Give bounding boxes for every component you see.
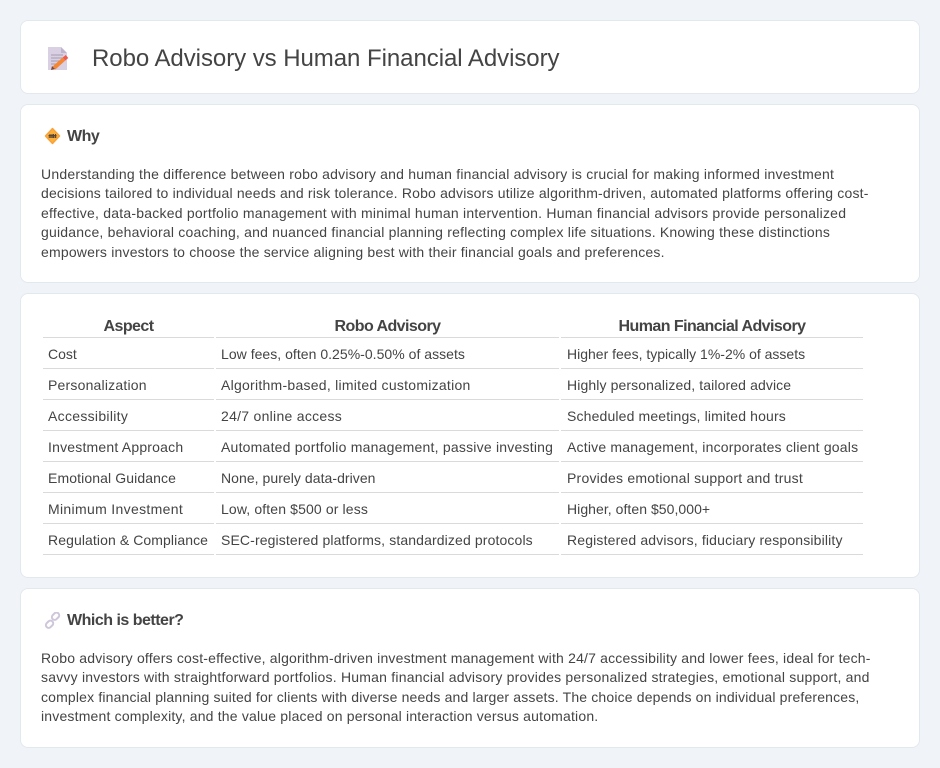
- panel: title header: [20, 20, 920, 94]
- text block: verdict: [41, 650, 871, 724]
- row: regulation and compliance: Regulation & Compliance: [48, 532, 208, 548]
- text block: why explanation: decisions tailored to individual needs and risk tolerance. Robo advisors utilize algorithm-driven, automated platforms offering cost-: [41, 185, 869, 201]
- text block: verdict: Robo advisory offers cost-effective, algorithm-driven investment management with 24/7 accessibility and lower fees, ideal for tech-: [41, 650, 871, 666]
- row: investment approach: Automated portfolio management, passive investing: [221, 439, 553, 455]
- row: minimum investment: Low, often $500 or less: [221, 501, 368, 517]
- panel: which is better: [20, 588, 920, 748]
- row: accessibility: [48, 408, 786, 424]
- text block: verdict: complex financial planning suited for clients with diverse needs and larger assets. The choice depends on individual preferences,: [41, 689, 859, 705]
- row: regulation and compliance: SEC-registered platforms, standardized protocols: [221, 532, 533, 548]
- row: regulation and compliance: Registered advisors, fiduciary responsibility: [567, 532, 843, 548]
- text block: why explanation: effective, data-backed portfolio management with minimal human intervention. Human financial advisors provide personalized: [41, 205, 846, 221]
- table header row: Aspect: [104, 318, 154, 335]
- row: emotional guidance: Emotional Guidance: [48, 470, 176, 486]
- text block: why explanation: [41, 166, 869, 260]
- row: accessibility: Scheduled meetings, limited hours: [567, 408, 786, 424]
- row: cost: Low fees, often 0.25%-0.50% of assets: [221, 346, 465, 362]
- row: accessibility: Accessibility: [48, 408, 128, 424]
- row: accessibility: 24/7 online access: [221, 408, 342, 424]
- comparison table: [43, 318, 863, 555]
- table header row: Human Financial Advisory: [619, 318, 805, 335]
- row: cost: Cost: [48, 346, 77, 362]
- row: personalization: [48, 377, 791, 393]
- heading: which is better: Which is better?: [67, 612, 183, 629]
- text block: why explanation: Understanding the difference between robo advisory and human financial advisory is crucial for making informed investment: [41, 166, 834, 182]
- row: emotional guidance: None, purely data-driven: [221, 470, 376, 486]
- row: emotional guidance: Provides emotional support and trust: [567, 470, 803, 486]
- heading: why: Why: [67, 128, 99, 145]
- panel: comparison table: [20, 293, 920, 578]
- text block: verdict: investment complexity, and the value placed on personal interaction versus automation.: [41, 708, 598, 724]
- row: minimum investment: Higher, often $50,000+: [567, 501, 710, 517]
- row: personalization: Personalization: [48, 377, 147, 393]
- panel: why: [20, 104, 920, 283]
- text block: why explanation: empowers investors to choose the service aligning best with their financial goals and preferences.: [41, 244, 665, 260]
- icon: memo with pencil: [48, 47, 68, 70]
- row: regulation and compliance: [48, 532, 843, 548]
- row: cost: [48, 346, 805, 362]
- icon: diamond sign: [44, 128, 60, 144]
- text block: verdict: savvy investors with straightforward portfolios. Human financial advisory provides personalized strategies, emotional support, and: [41, 669, 870, 685]
- row: cost: Higher fees, typically 1%-2% of assets: [567, 346, 805, 362]
- icon: chain link: [44, 612, 60, 629]
- table header row: [104, 318, 806, 335]
- table header row: Robo Advisory: [335, 318, 440, 335]
- row: minimum investment: [48, 501, 710, 517]
- row: personalization: Algorithm-based, limited customization: [221, 377, 471, 393]
- text block: why explanation: guidance, behavioral coaching, and nuanced financial planning reflecting complex life situations. Knowing these distinctions: [41, 224, 830, 240]
- row: minimum investment: Minimum Investment: [48, 501, 183, 517]
- title: Robo Advisory vs Human Financial Advisory: [92, 45, 560, 72]
- row: personalization: Highly personalized, tailored advice: [567, 377, 791, 393]
- row: emotional guidance: [48, 470, 803, 486]
- row: investment approach: [48, 439, 858, 455]
- row: investment approach: Active management, incorporates client goals: [567, 439, 858, 455]
- row: investment approach: Investment Approach: [48, 439, 183, 455]
